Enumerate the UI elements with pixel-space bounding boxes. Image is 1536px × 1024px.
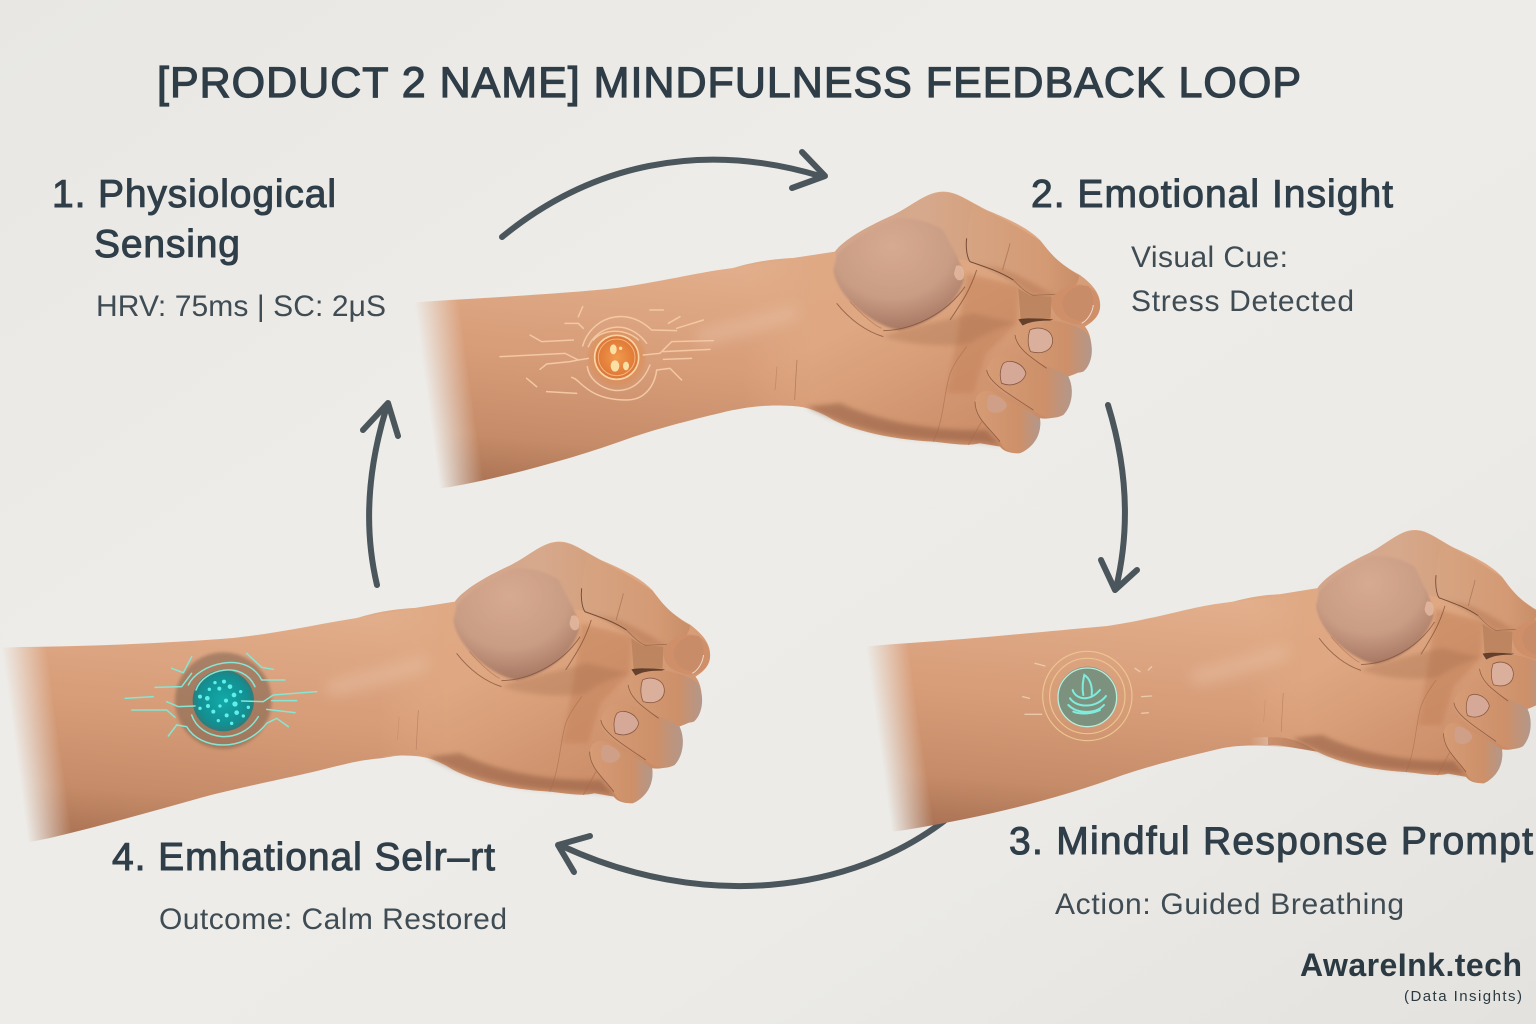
arm 4: teal sensor: [0, 542, 710, 846]
step 4 heading: 4. Emhational Selr–rt: [112, 836, 495, 879]
title: [PRODUCT 2 NAME] MINDFULNESS FEEDBACK LOOP: [157, 59, 1301, 107]
icon: teal sensor tattoo: [125, 652, 317, 749]
brand mark: [1300, 947, 1522, 1005]
step 1 text: [52, 173, 386, 323]
step 1 heading line 2: Sensing: [94, 223, 240, 266]
step 2 text: [1031, 173, 1393, 318]
arrow: response to self-regulation: [558, 818, 948, 886]
step 2 detail line 1: Visual Cue:: [1131, 241, 1288, 274]
brand tagline: (Data Insights): [1404, 988, 1522, 1005]
arm 1: orange sensor: [405, 192, 1100, 492]
icon: orange sensor tattoo: [500, 307, 713, 400]
step 4 text: [112, 836, 507, 936]
step 1 heading: 1. Physiological: [52, 173, 336, 216]
step 2 heading: 2. Emotional Insight: [1031, 173, 1393, 216]
step 1 reading: HRV: 75ms | SC: 2μS: [96, 290, 386, 323]
step 3 detail: Action: Guided Breathing: [1055, 888, 1404, 921]
brand name: AwareInk.tech: [1300, 947, 1522, 983]
arrow: self-regulation to sensing: [363, 403, 398, 585]
arrow: sensing to insight: [502, 152, 825, 237]
arm 3: breathing sensor: [860, 530, 1536, 834]
step 4 detail: Outcome: Calm Restored: [159, 903, 507, 936]
arrow: insight to response: [1101, 405, 1137, 590]
step 2 detail line 2: Stress Detected: [1131, 285, 1354, 318]
icon: breathing sensor tattoo: [1023, 651, 1152, 741]
step 3 heading: 3. Mindful Response Prompt: [1009, 820, 1533, 863]
step 3 text: [1009, 820, 1533, 921]
